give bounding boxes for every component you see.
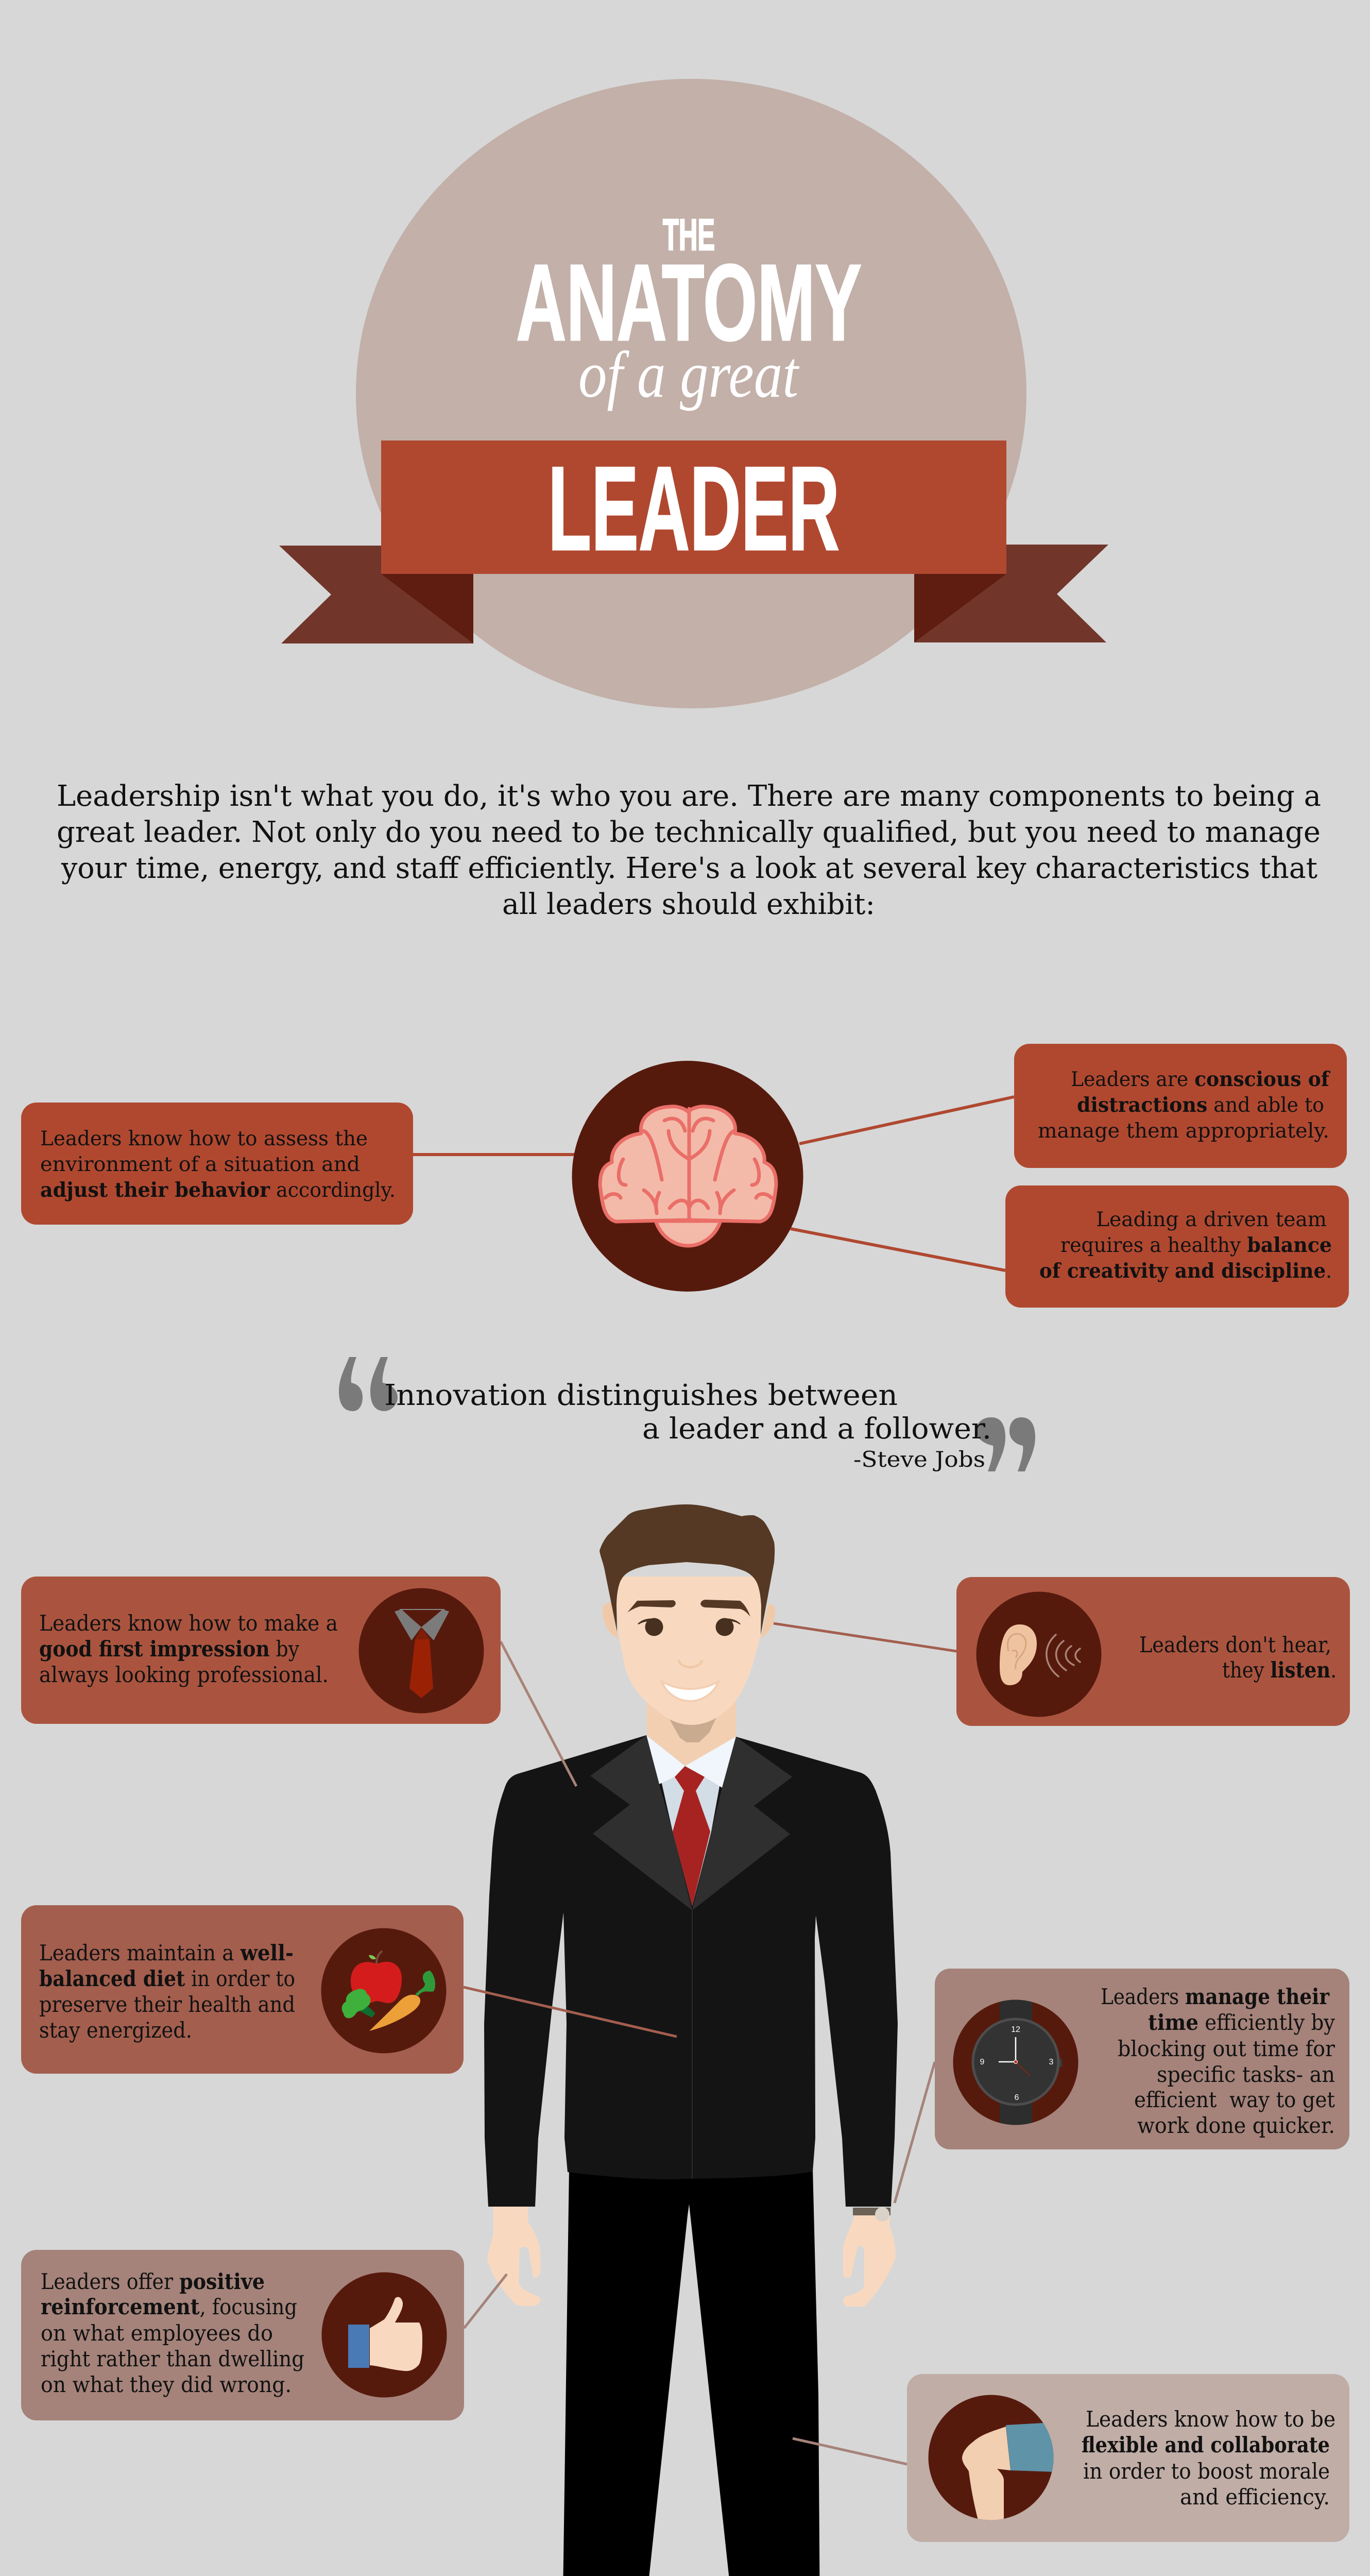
smile [662, 1682, 718, 1701]
icon: brain [572, 1061, 803, 1292]
callout: positive reinforcement: reinforcement, focusing [41, 2294, 297, 2319]
intro text [57, 779, 1321, 921]
callout: flexible and collaborate: and efficiency. [1180, 2484, 1330, 2510]
callout: balanced diet [21, 1905, 464, 2074]
quote: a leader and a follower. [642, 1412, 991, 1446]
intro text: great leader. Not only do you need to be technically qualified, but you need to manage [57, 816, 1321, 849]
icon: collar and tie [358, 1588, 484, 1714]
callout: flexible and collaborate: flexible and collaborate [1082, 2432, 1330, 2458]
tie [673, 1766, 710, 1906]
intro text: your time, energy, and staff efficiently. Here's a look at several key characteristics that [61, 852, 1317, 885]
right ribbon tail [914, 545, 1108, 642]
callout: positive reinforcement: on what they did wrong. [41, 2372, 292, 2397]
callout: positive reinforcement: right rather than dwelling [41, 2346, 304, 2371]
callout: balanced diet: preserve their health and [39, 1992, 295, 2017]
callout: first impression: always looking professional. [39, 1662, 329, 1687]
callout: conscious of distractions [1014, 1044, 1347, 1168]
callout: balanced diet: balanced diet in order to [39, 1966, 295, 1991]
left ribbon tail [279, 546, 473, 643]
icon: watch: 9 [980, 2058, 985, 2066]
callout: manage time: blocking out time for [1118, 2036, 1335, 2061]
icon: watch: 12 [1011, 2025, 1020, 2034]
callout: creativity and discipline: of creativity and discipline. [1039, 1259, 1332, 1283]
callout: flexible and collaborate: Leaders know how to be [1086, 2406, 1335, 2432]
quote: -Steve Jobs [853, 1447, 985, 1472]
man illustration [484, 1504, 898, 2576]
wrist watch [853, 2207, 890, 2222]
icon: thumbs up [321, 2272, 447, 2398]
callout: adjust behavior [21, 1103, 413, 1225]
trousers and shoes [494, 2169, 883, 2576]
quote: Innovation distinguishes between [384, 1379, 898, 1412]
neck [647, 1695, 736, 1766]
callout: flexible and collaborate [907, 2374, 1349, 2542]
callout: adjust behavior: environment of a situation and [40, 1153, 360, 1176]
title text: LEADER [548, 442, 840, 575]
ears [603, 1602, 775, 1638]
callout: creativity and discipline: requires a healthy balance [1060, 1233, 1332, 1257]
callout: manage time: Leaders manage their [1101, 1984, 1330, 2009]
callout: adjust behavior: adjust their behavior accordingly. [40, 1178, 396, 1202]
connector lines [464, 1623, 956, 2576]
face [616, 1577, 761, 1725]
icon: opening quote mark [339, 1357, 398, 1411]
lapels [590, 1735, 792, 1910]
callout: creativity and discipline: Leading a driven team [1096, 1208, 1327, 1231]
callout: first impression [21, 1577, 501, 1724]
callout: balanced diet: Leaders maintain a well- [39, 1940, 294, 1965]
callout: listen: Leaders don't hear, [1139, 1632, 1331, 1657]
intro text: Leadership isn't what you do, it's who you are. There are many components to being a [57, 779, 1321, 813]
eyes [638, 1618, 741, 1636]
intro text: all leaders should exhibit: [502, 888, 875, 921]
icon: closing quote mark [977, 1417, 1035, 1471]
callout: manage time: time efficiently by [1148, 2010, 1335, 2035]
icon: bent knee [928, 2395, 1056, 2522]
right hand [843, 2208, 896, 2307]
callout: conscious of distractions: Leaders are conscious of [1071, 1067, 1330, 1091]
callout: positive reinforcement [21, 2250, 464, 2420]
title text: of a great [578, 338, 800, 411]
title badge [279, 79, 1108, 708]
callout: first impression: good first impression by [39, 1636, 299, 1662]
icon: watch [953, 1999, 1078, 2126]
callout: listen [956, 1577, 1350, 1726]
title text [516, 211, 862, 575]
icon: watch: 6 [1015, 2093, 1019, 2102]
jacket [484, 1735, 898, 2207]
nose [679, 1661, 702, 1667]
callout: balanced diet: stay energized. [39, 2018, 192, 2043]
callout: listen: they listen. [1222, 1657, 1337, 1683]
icon: watch: 3 [1049, 2058, 1054, 2066]
callout: manage time [935, 1969, 1349, 2149]
main ribbon [381, 440, 1006, 574]
title text: ANATOMY [516, 242, 862, 363]
icon: apple, broccoli and carrot [321, 1928, 446, 2054]
callout: conscious of distractions: manage them appropriately. [1038, 1120, 1329, 1143]
icon: ear [977, 1592, 1101, 1717]
shirt front [659, 1772, 722, 1906]
callout: flexible and collaborate: in order to boost morale [1083, 2459, 1330, 2484]
shirt collar [646, 1735, 736, 1788]
brain connectors [413, 1097, 1014, 1270]
callout: positive reinforcement: on what employees do [41, 2320, 273, 2346]
left hand [487, 2202, 540, 2306]
callout: adjust behavior: Leaders know how to assess the [40, 1127, 368, 1150]
oval background [356, 79, 1026, 708]
eyebrows [627, 1600, 750, 1617]
callout: manage time: work done quicker. [1137, 2113, 1335, 2138]
callout: conscious of distractions: distractions and able to [1077, 1093, 1324, 1117]
callout: first impression: Leaders know how to make a [39, 1611, 338, 1636]
hair [600, 1504, 775, 1635]
callout: creativity and discipline [1005, 1185, 1349, 1308]
callout: positive reinforcement: Leaders offer positive [41, 2269, 265, 2294]
neck shadow [666, 1713, 718, 1742]
title text: THE [663, 211, 715, 260]
callout: manage time: specific tasks- an [1157, 2062, 1335, 2087]
quote [384, 1379, 991, 1472]
callout: manage time: efficient way to get [1134, 2087, 1335, 2112]
